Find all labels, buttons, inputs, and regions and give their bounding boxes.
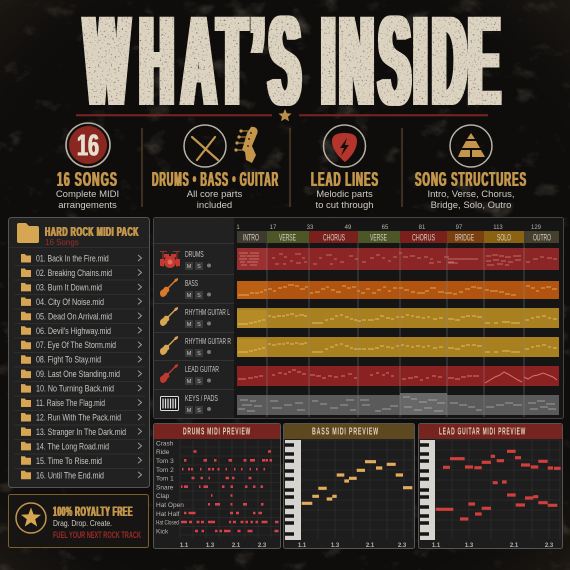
mute solo controls: S xyxy=(197,293,201,299)
song sections xyxy=(237,231,559,243)
ruler: lead preview: 1.1 xyxy=(432,543,441,549)
feature: lead lines xyxy=(311,125,379,211)
mute solo controls xyxy=(185,349,211,357)
track: bass xyxy=(160,278,559,299)
mute solo controls: M xyxy=(187,322,192,328)
icon: red guitar xyxy=(160,364,178,383)
track: drums xyxy=(160,248,559,270)
bar numbers xyxy=(236,225,542,231)
panel: bass midi preview xyxy=(284,424,414,549)
ruler: bass preview: 2.3 xyxy=(398,543,407,549)
mute solo controls xyxy=(185,262,211,270)
mute solo controls: M xyxy=(187,293,192,299)
song sections: CHORUS xyxy=(323,232,345,242)
drum lane labels: Kick xyxy=(156,528,169,536)
ruler: bass preview: 1.3 xyxy=(331,543,340,549)
midi clip: bass xyxy=(237,281,559,299)
text: 16 songs description: Complete MIDI xyxy=(56,189,119,200)
song names: 02. Breaking Chains.mid xyxy=(36,268,112,279)
heading: pack title: HARD ROCK MIDI PACK xyxy=(45,225,139,239)
feature: drums bass guitar xyxy=(152,125,279,211)
drum lane labels: Snare xyxy=(156,484,174,492)
ruler: lead preview: 1.3 xyxy=(465,543,474,549)
ruler: lead preview xyxy=(432,543,554,549)
song sections: SOLO xyxy=(497,232,511,242)
icon: pyramid xyxy=(450,125,492,167)
lead notes xyxy=(436,451,561,519)
ruler: drums preview: 2.3 xyxy=(258,543,267,549)
bar numbers: 17 xyxy=(270,225,277,231)
list: song files xyxy=(21,254,142,481)
text: lead lines description: to cut through xyxy=(315,200,374,211)
track: keys / pads xyxy=(160,393,559,415)
label: drums: DRUMS xyxy=(185,249,204,259)
bar numbers: 49 xyxy=(345,225,352,231)
midi clip: rhythm guitar R xyxy=(237,337,559,357)
icon: bass guitar headstock xyxy=(234,127,258,163)
text: drums bass guitar description: All core parts xyxy=(187,189,242,200)
text: drums bass guitar description: included xyxy=(197,200,232,211)
folder icons xyxy=(21,254,31,479)
icon: 16 badge: 16 xyxy=(77,128,99,162)
song sections: CHORUS xyxy=(412,232,435,242)
mute solo controls xyxy=(185,320,211,328)
song names: 08. Fight To Stay.mid xyxy=(36,355,101,366)
ruler: bass preview: 2.1 xyxy=(366,543,375,549)
mute solo controls: M xyxy=(187,408,192,414)
song names xyxy=(36,254,126,481)
callout: royalty free xyxy=(8,494,148,548)
song names: 11. Raise The Flag.mid xyxy=(36,398,105,409)
drum lane labels: Hat Closed xyxy=(156,520,179,526)
drum lane labels: Ride xyxy=(156,449,170,456)
mute solo controls: M xyxy=(187,264,192,270)
panel: drums midi preview xyxy=(154,424,280,549)
song sections: BRIDGE xyxy=(455,232,474,242)
bar numbers: 129 xyxy=(531,225,542,231)
drum lane labels: Crash xyxy=(156,440,174,448)
icon: gold guitar xyxy=(160,307,178,326)
song names: 06. Devil's Highway.mid xyxy=(36,326,111,337)
mute solo controls: S xyxy=(197,379,201,385)
icon: star badge xyxy=(16,503,46,533)
bar numbers: 1 xyxy=(236,225,240,231)
ruler: lead preview: 2.3 xyxy=(545,543,554,549)
song names: 12. Run With The Pack.mid xyxy=(36,412,121,424)
callout: royalty free: 100% ROYALTY FREE xyxy=(53,503,133,519)
heading: 16 songs: 16 SONGS xyxy=(57,169,118,191)
song names: 16. Until The End.mid xyxy=(36,470,104,481)
header: lead preview xyxy=(419,424,562,439)
text: song structures description: Bridge, Solo, Outro xyxy=(431,200,511,211)
panel: song file browser xyxy=(8,218,150,488)
header: bass preview: BASS MIDI PREVIEW xyxy=(312,426,379,438)
mute solo controls: S xyxy=(197,264,201,270)
mute solo controls: S xyxy=(197,351,201,357)
song names: 03. Burn It Down.mid xyxy=(36,282,102,293)
text: call to action: FUEL YOUR NEXT ROCK TRACK xyxy=(53,530,141,540)
song names: 01. Back In the Fire.mid xyxy=(36,254,109,264)
panel: lead guitar midi preview xyxy=(418,424,562,549)
icon: gold guitar xyxy=(160,336,178,355)
text: song count: 16 Songs xyxy=(45,238,79,247)
drum lane labels: Tom 3 xyxy=(156,458,174,465)
text: song structures description: Intro, Verse, Chorus, xyxy=(427,189,515,200)
piano keys xyxy=(420,440,435,540)
ruler: lead preview: 2.1 xyxy=(510,543,519,549)
track: lead guitar xyxy=(160,364,559,386)
ruler: drums preview: 1.1 xyxy=(180,543,189,549)
mute solo controls xyxy=(185,291,211,299)
song names: 13. Stranger In The Dark.mid xyxy=(36,427,126,438)
song names: 05. Dead On Arrival.mid xyxy=(36,311,112,322)
mute solo controls: M xyxy=(187,379,192,385)
icon: orange guitar xyxy=(160,278,178,297)
text: lead lines description: Melodic parts xyxy=(316,189,373,200)
mute solo controls xyxy=(185,406,211,414)
ruler: drums preview: 1.3 xyxy=(206,543,215,549)
mute solo controls xyxy=(185,377,211,385)
title divider with star xyxy=(76,109,488,121)
feature: 16 songs xyxy=(56,123,119,211)
label: bass: BASS xyxy=(185,278,198,288)
song sections: OUTRO xyxy=(533,232,551,242)
chevrons xyxy=(138,255,142,478)
song names: 14. The Long Road.mid xyxy=(36,441,109,452)
song sections: VERSE xyxy=(279,232,296,242)
label: rhythm guitar L: RHYTHM GUITAR L xyxy=(185,307,230,317)
icon: drum kit xyxy=(160,252,180,268)
drum lane labels: Clap xyxy=(156,493,170,500)
ruler: drums preview xyxy=(180,543,267,549)
song names: 04. City Of Noise.mid xyxy=(36,297,104,308)
song names: 10. No Turning Back.mid xyxy=(36,384,114,395)
label: lead guitar: LEAD GUITAR xyxy=(185,364,219,374)
mute solo controls: S xyxy=(197,408,201,414)
ruler: bass preview xyxy=(298,543,407,549)
bar numbers: 33 xyxy=(307,225,314,231)
bar numbers: 97 xyxy=(456,225,463,231)
label: keys / pads: KEYS / PADS xyxy=(185,393,218,403)
header: drums preview: DRUMS MIDI PREVIEW xyxy=(183,426,251,438)
panel: DAW arrangement xyxy=(154,218,564,418)
song names: 09. Last One Standing.mid xyxy=(36,369,120,380)
icon: keyboard xyxy=(160,396,178,410)
midi clip: keys xyxy=(237,393,559,415)
ruler: drums preview: 2.1 xyxy=(232,543,241,549)
label: rhythm guitar R: RHYTHM GUITAR R xyxy=(185,336,231,346)
midi clip: lead guitar xyxy=(237,366,559,386)
text: 16 songs description: arrangements xyxy=(58,200,117,211)
song names: 07. Eye Of The Storm.mid xyxy=(36,340,116,351)
icon: large folder xyxy=(17,223,39,243)
bar numbers: 65 xyxy=(382,225,389,231)
text: LEAD LINES xyxy=(311,169,379,191)
drum lane labels xyxy=(156,440,184,536)
mute solo controls: M xyxy=(187,351,192,357)
drum lane labels: Tom 2 xyxy=(156,467,174,474)
drum lane labels: Hat Half xyxy=(156,511,180,518)
piano keys xyxy=(285,440,301,540)
drum lane labels: Tom 1 xyxy=(156,476,174,482)
drum hits xyxy=(181,452,278,531)
bar numbers: 81 xyxy=(419,225,426,231)
song sections: VERSE xyxy=(370,232,387,242)
drum lane labels: Hat Open xyxy=(156,502,184,509)
icon: guitar pick xyxy=(324,125,366,167)
ruler: bass preview: 1.1 xyxy=(298,543,307,549)
mute solo controls: S xyxy=(197,322,201,328)
text: DRUMS • BASS • GUITAR xyxy=(152,169,279,191)
track: rhythm guitar L xyxy=(160,307,559,328)
icon: crossed drumsticks xyxy=(184,125,226,167)
bar numbers: 113 xyxy=(493,225,503,231)
text: tagline: Drag. Drop. Create. xyxy=(53,518,112,528)
bass notes xyxy=(302,462,412,503)
song sections: INTRO xyxy=(243,232,259,242)
midi clip: rhythm guitar L xyxy=(237,308,559,328)
song names: 15. Time To Rise.mid xyxy=(36,456,102,467)
feature: song structures xyxy=(415,125,527,211)
track: rhythm guitar R xyxy=(160,336,559,357)
midi clip: drums xyxy=(237,248,559,270)
